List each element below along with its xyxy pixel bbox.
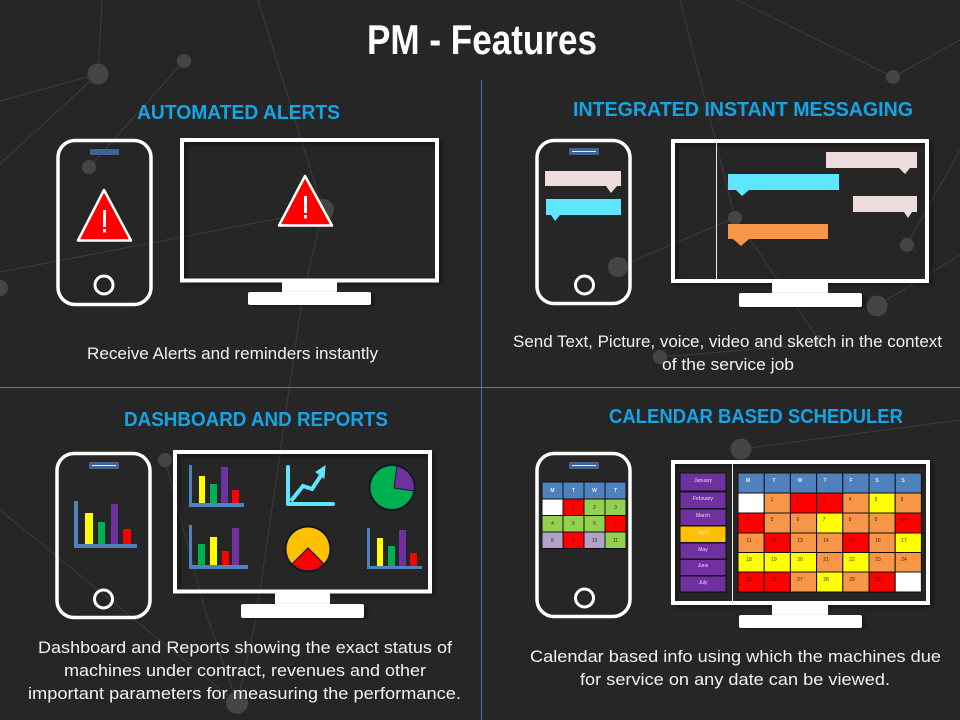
calendar grid: 9	[875, 517, 878, 523]
panel: automated alerts	[58, 102, 437, 363]
heading: messaging: INTEGRATED INSTANT MESSAGING	[573, 99, 913, 121]
month list: April	[698, 530, 708, 536]
calendar grid: 30	[875, 577, 881, 583]
phone with bar chart	[57, 454, 150, 618]
phone with alert	[58, 140, 151, 304]
calendar grid: 20	[797, 557, 803, 563]
chart: gauge pie	[286, 526, 330, 572]
phone with mini calendar: 6	[593, 521, 596, 527]
calendar grid: 17	[901, 538, 907, 544]
phone with mini calendar: 9	[572, 538, 575, 544]
month list: February	[693, 496, 713, 502]
calendar grid: 22	[849, 557, 855, 563]
calendar grid: 10	[900, 517, 906, 523]
chart: bars one	[189, 465, 244, 507]
calendar grid: 25	[746, 577, 752, 583]
text: dashboard description: important parameters for measuring the performance.	[28, 684, 461, 703]
calendar grid: 5	[771, 517, 774, 523]
text: alerts description: Receive Alerts and reminders instantly	[87, 344, 378, 363]
calendar grid: S	[901, 478, 905, 484]
calendar grid: 5	[875, 497, 878, 503]
calendar grid: T	[823, 478, 827, 484]
calendar grid: 2	[797, 497, 800, 503]
calendar grid	[738, 473, 921, 592]
monitor with calendar	[673, 462, 928, 628]
text: calendar description: Calendar based info using which the machines due	[530, 647, 941, 666]
calendar grid: 13	[797, 538, 803, 544]
phone with mini calendar: 8	[551, 538, 554, 544]
calendar grid: 26	[771, 577, 777, 583]
calendar grid: 14	[823, 538, 829, 544]
calendar grid: 7	[823, 517, 826, 523]
month list: July	[699, 580, 708, 586]
chart: bars two	[189, 525, 248, 569]
heading: dashboard: DASHBOARD AND REPORTS	[124, 409, 388, 431]
calendar grid: 6	[797, 517, 800, 523]
calendar grid: 11	[746, 538, 752, 544]
phone with mini calendar: 7	[614, 521, 617, 527]
phone with mini calendar: 1	[572, 505, 575, 511]
phone with mini calendar: 10	[592, 538, 597, 544]
calendar grid: 18	[746, 557, 752, 563]
monitor with alert	[182, 140, 437, 305]
title: PM - Features	[367, 16, 597, 63]
phone with mini calendar	[537, 454, 630, 616]
phone with mini calendar: M	[550, 488, 555, 494]
heading: automated alerts: AUTOMATED ALERTS	[137, 102, 340, 124]
text: messaging description: Send Text, Picture, voice, video and sketch in the context	[513, 332, 942, 351]
panel: dashboard and reports	[28, 409, 461, 703]
calendar grid: M	[746, 478, 750, 484]
calendar grid: 23	[875, 557, 881, 563]
monitor with chat bubbles	[673, 141, 927, 307]
text: dashboard description: machines under contract, revenues and other	[64, 661, 426, 680]
month list: May	[698, 547, 708, 553]
text: messaging description: of the service job	[662, 355, 794, 374]
panel: integrated instant messaging	[513, 99, 942, 374]
chart: bars three	[367, 528, 422, 569]
phone with mini calendar: W	[592, 488, 597, 494]
phone with mini calendar: T	[572, 488, 575, 494]
month list: January	[694, 478, 712, 484]
phone with chat bubbles	[537, 140, 630, 304]
calendar grid: 21	[823, 557, 829, 563]
month list: March	[696, 513, 710, 519]
calendar grid: 1	[771, 497, 774, 503]
phone with mini calendar: 5	[572, 521, 575, 527]
phone with mini calendar: 2	[593, 505, 596, 511]
calendar grid: 7	[746, 517, 749, 523]
phone with mini calendar: 3	[614, 505, 617, 511]
calendar grid: 16	[875, 538, 881, 544]
calendar grid: S	[875, 478, 879, 484]
calendar grid: 6	[901, 497, 904, 503]
text: dashboard description	[28, 638, 461, 703]
icon: trend arrow	[288, 466, 333, 504]
phone with mini calendar: 4	[551, 521, 554, 527]
calendar grid: 15	[849, 538, 855, 544]
month list: June	[698, 563, 709, 569]
calendar grid: 19	[771, 557, 777, 563]
monitor with dashboard	[175, 452, 430, 618]
calendar grid: 4	[849, 497, 852, 503]
chart: pie	[370, 465, 414, 510]
heading: calendar: CALENDAR BASED SCHEDULER	[609, 406, 904, 428]
month list	[680, 473, 726, 592]
panel: calendar based scheduler	[530, 406, 941, 689]
calendar grid: 24	[901, 557, 907, 563]
calendar grid: T	[772, 478, 776, 484]
calendar grid: W	[798, 478, 803, 484]
text: calendar description	[530, 647, 941, 689]
phone with mini calendar: 11	[613, 538, 618, 544]
calendar grid: 8	[849, 517, 852, 523]
calendar grid: 27	[797, 577, 803, 583]
text: messaging description	[513, 332, 942, 374]
calendar grid: 12	[771, 538, 777, 544]
text: calendar description: for service on any date can be viewed.	[580, 670, 890, 689]
phone with mini calendar: T	[614, 488, 617, 494]
calendar grid: 29	[849, 577, 855, 583]
calendar grid: 28	[823, 577, 829, 583]
calendar grid: F	[849, 478, 853, 484]
calendar grid: 3	[823, 497, 826, 503]
text: dashboard description: Dashboard and Reports showing the exact status of	[38, 638, 452, 657]
